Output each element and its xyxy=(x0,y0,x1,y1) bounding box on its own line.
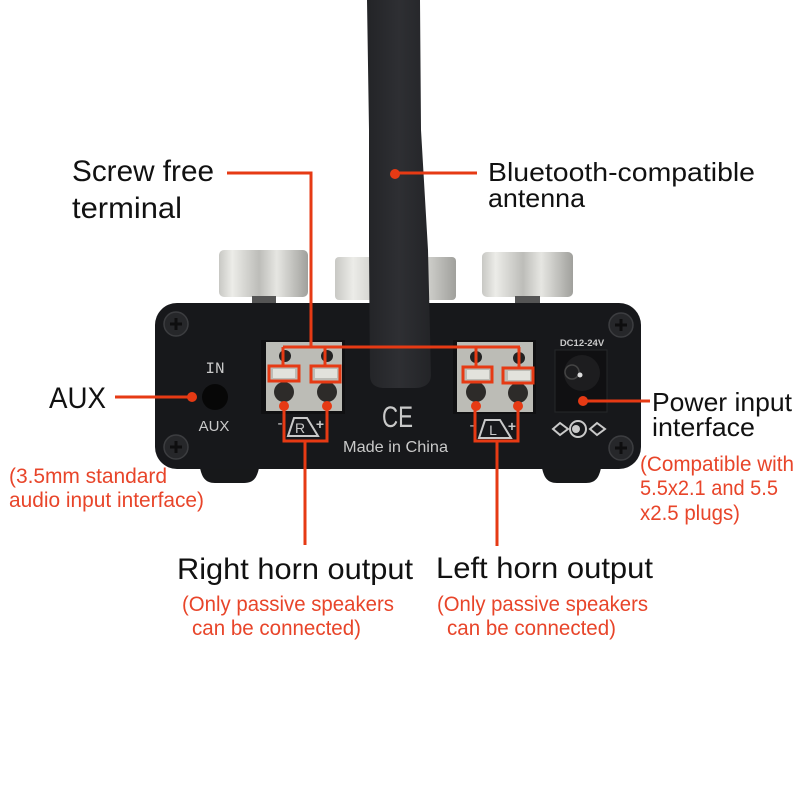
left terminal block xyxy=(453,340,536,414)
printed panel labels: DC12-24V xyxy=(560,338,605,349)
note: AUX: (3.5mm standard xyxy=(9,465,167,488)
callout lines xyxy=(115,169,650,546)
printed panel labels: + xyxy=(316,416,324,432)
label: interface: interface xyxy=(652,412,755,442)
label: left horn: Left horn output xyxy=(436,552,654,585)
printed panel labels: CE xyxy=(382,401,413,434)
note: left horn: (Only passive speakers xyxy=(437,593,648,616)
power jack xyxy=(555,350,607,412)
printed panel labels: AUX xyxy=(199,418,229,435)
antenna xyxy=(367,0,431,388)
amplifier body xyxy=(155,303,641,469)
label: right horn: Right horn output xyxy=(177,553,414,586)
note: power line 3: x2.5 plugs) xyxy=(640,502,740,525)
screws xyxy=(164,312,633,460)
printed panel labels: - xyxy=(278,415,282,432)
printed panel labels: L xyxy=(489,422,497,438)
knobs xyxy=(219,250,573,304)
label: antenna: Bluetooth-compatible xyxy=(488,157,755,187)
printed panel labels: + xyxy=(508,418,516,434)
printed panel labels: IN xyxy=(205,360,225,378)
printed panel labels: Made in China xyxy=(343,439,448,456)
printed panel labels: R xyxy=(295,420,305,436)
note: right horn: (Only passive speakers xyxy=(182,593,394,616)
note: power line 2: 5.5x2.1 and 5.5 xyxy=(640,477,778,500)
note: left horn line 2: can be connected) xyxy=(447,617,616,640)
right terminal block xyxy=(261,340,345,414)
label: antenna line 2: antenna xyxy=(488,183,586,213)
aux jack xyxy=(202,384,228,410)
label: screw free terminal: Screw free xyxy=(72,155,214,188)
label: AUX: AUX xyxy=(49,382,106,415)
note: power: (Compatible with xyxy=(640,453,794,476)
note: right horn line 2: can be connected) xyxy=(192,617,361,640)
printed panel labels: - xyxy=(470,417,474,434)
label: power input: Power input xyxy=(652,387,793,417)
printed panel labels xyxy=(199,338,605,456)
note: AUX line 2: audio input interface) xyxy=(9,489,204,512)
feet xyxy=(200,468,601,483)
label: terminal: terminal xyxy=(72,192,182,225)
